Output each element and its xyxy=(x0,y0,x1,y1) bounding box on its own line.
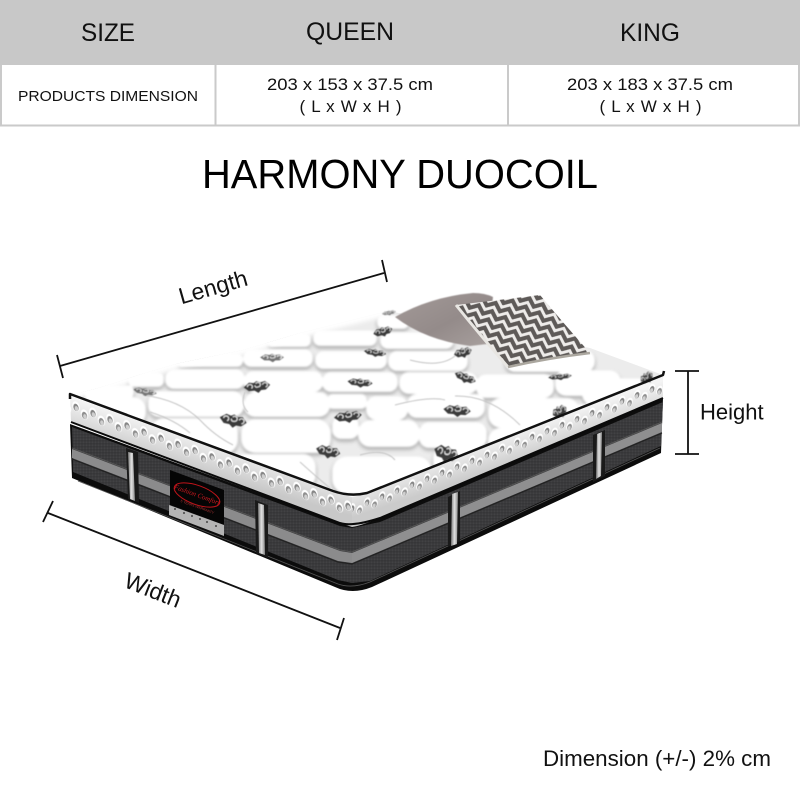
width dimension arrow xyxy=(43,501,344,640)
size table xyxy=(0,0,800,126)
table dimension row: PRODUCTS DIMENSION xyxy=(18,88,198,105)
table header row xyxy=(0,0,800,65)
table dimension row: ( L x W x H ) xyxy=(300,97,402,116)
title: HARMONY DUOCOIL xyxy=(202,151,598,197)
brand label xyxy=(169,470,224,536)
table dimension row: 203 x 153 x 37.5 cm xyxy=(267,75,433,94)
grey pillow xyxy=(395,293,493,346)
mattress base xyxy=(70,398,663,591)
table header row: QUEEN xyxy=(306,18,394,46)
width label: Width xyxy=(121,567,185,613)
table dimension row xyxy=(0,65,800,126)
tolerance note: Dimension (+/-) 2% cm xyxy=(543,746,771,771)
grey band right face xyxy=(352,423,662,563)
brand label: Fashion Comfort xyxy=(172,483,222,507)
handles xyxy=(126,430,605,558)
black piping xyxy=(70,371,664,495)
length dimension arrow xyxy=(57,260,387,378)
table dimension row: 203 x 183 x 37.5 cm xyxy=(567,75,733,94)
length label: Length xyxy=(176,265,250,309)
table header row: KING xyxy=(620,19,680,47)
quilted top surface xyxy=(72,311,663,496)
table dimension row: ( L x W x H ) xyxy=(600,97,702,116)
quilting ornaments xyxy=(133,309,656,466)
table header row: SIZE xyxy=(81,19,135,47)
dimpled side band xyxy=(70,376,663,527)
brand label: 5 YEARS WARRANTY xyxy=(180,499,215,515)
height label: Height xyxy=(700,400,764,424)
grey band left face xyxy=(72,449,352,563)
mattress illustration xyxy=(70,293,664,591)
height dimension arrow xyxy=(675,371,699,454)
chevron pillow xyxy=(456,295,590,367)
